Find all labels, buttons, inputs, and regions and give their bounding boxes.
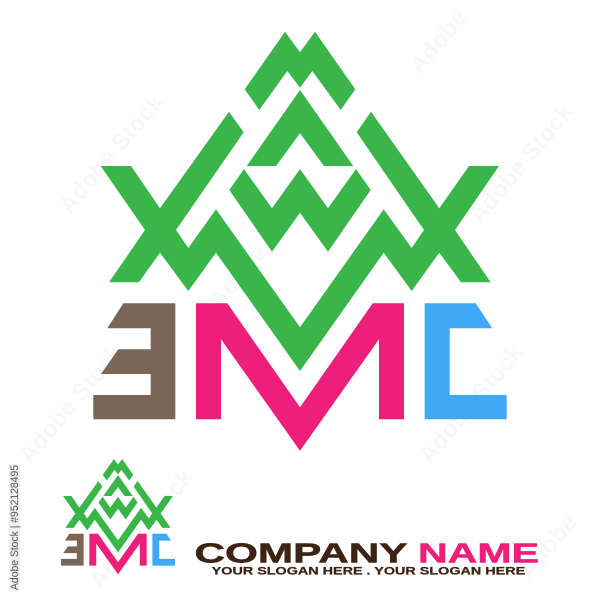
slogan: YOUR SLOGAN HERE . YOUR SLOGAN HERE [212, 565, 525, 577]
icon: brown letter E [93, 303, 175, 419]
icon: green inner W [229, 169, 371, 252]
company name: COMPANY [194, 538, 408, 569]
icon: green inner A [247, 90, 353, 166]
icon: blue letter C [425, 303, 507, 419]
company name: NAME [418, 538, 539, 569]
watermarks: Adobe [514, 509, 583, 584]
watermarks: Adobe Stock [14, 339, 129, 469]
watermarks: Adobe Stock [464, 99, 579, 229]
small logo [61, 459, 175, 574]
icon: green XWX chevron [101, 112, 499, 371]
watermarks: Adobe Stock [84, 464, 199, 594]
icon: green top M [245, 32, 355, 110]
watermarks: Adobe Stock [414, 339, 529, 469]
main logo [93, 32, 507, 451]
company name [194, 538, 539, 569]
watermarks: Adobe Stock [204, 184, 319, 314]
watermarks: Adobe Stock [54, 89, 169, 219]
icon: pink letter M [196, 303, 404, 451]
watermarks: Adobe [404, 4, 473, 79]
stock id label: Adobe Stock | #952128495 [9, 465, 21, 590]
